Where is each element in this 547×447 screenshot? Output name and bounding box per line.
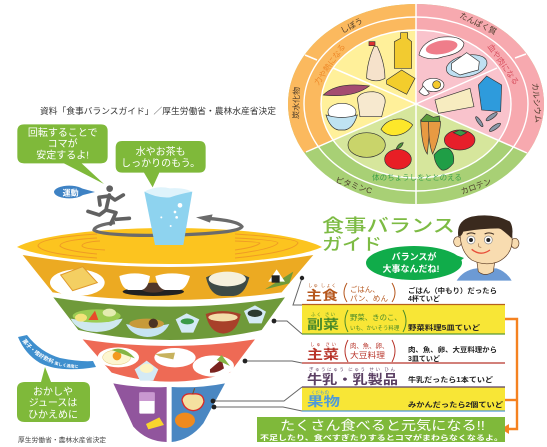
mouth [472, 249, 490, 253]
title: balance guide: 食事バランス [322, 216, 455, 236]
icon: glass of milk [139, 392, 155, 414]
tier: fruit [172, 383, 225, 442]
label: exercise [54, 186, 95, 198]
icon: apple slice [182, 388, 204, 411]
wheel labels: 炭水化物 [290, 87, 302, 119]
icon: tofu [452, 53, 479, 75]
inner plate colours [322, 30, 510, 178]
callout: limit snacks [17, 367, 90, 422]
icon: fried egg plate [98, 347, 139, 367]
icon: tofu plate [444, 51, 489, 81]
wheel food illustrations [323, 33, 502, 170]
row: fruit: くだもの [311, 390, 329, 396]
icon: cabbage [348, 133, 385, 157]
icon: orange [175, 413, 195, 428]
icon: cheese [435, 88, 474, 113]
icon: mayonnaise cap [369, 42, 375, 46]
row: staple foods: 4杯ていど [408, 294, 440, 303]
icon: sweet potato [323, 85, 369, 96]
callout: balance matters: 大事なんだね! [382, 263, 440, 274]
row: main dishes [307, 340, 497, 363]
row: staple foods: パン、めん [350, 294, 388, 303]
row: main dishes: 大豆料理 [350, 350, 385, 360]
wheel labels: ビタミンC [334, 176, 373, 196]
wheel labels: たんぱく質 [458, 10, 498, 37]
tier: main dishes [83, 339, 255, 382]
callout: drink water: 水やお茶も [136, 145, 186, 158]
banner: eat well [257, 417, 505, 442]
tier: staple foods [23, 255, 313, 300]
row: dairy: 牛乳だったら1本ていど [408, 375, 493, 384]
row: staple foods: 主食 [306, 288, 338, 303]
row: staple foods: ごはん（中もり）だったら [408, 286, 497, 295]
banner: eat well: たくさん食べると元気になる!! [280, 418, 485, 433]
wheel labels: しぼう [339, 16, 365, 35]
icon: milk carton [478, 76, 502, 112]
shirt [457, 268, 512, 281]
hair [458, 215, 513, 238]
ears [454, 237, 519, 248]
banner: eat well: 不足したり、食べすぎたりするとコマがまわらなくなるよ。 [260, 433, 503, 442]
icon: salad bowl [71, 309, 123, 332]
row: staple foods: しゅ しょく [308, 283, 336, 289]
food wheel [288, 4, 544, 204]
icon: fish plate [154, 348, 196, 367]
arrow: rotation [94, 214, 242, 235]
icon: tofu dish [135, 361, 158, 381]
callout: spin stabilises: 回転することで [28, 127, 97, 139]
glass of water [144, 187, 192, 245]
eyes [467, 236, 492, 244]
connector lines [211, 276, 304, 411]
callout: spin stabilises: コマが [48, 137, 78, 150]
icon: apple leaf [396, 143, 403, 149]
row: dairy [307, 366, 493, 387]
pupils [469, 238, 490, 242]
icon: cheese wedge [146, 417, 164, 429]
row: side dishes: 野菜、きのこ、 [350, 313, 402, 322]
icon: mayonnaise bottle [367, 47, 385, 81]
wheel spokes [305, 4, 527, 204]
icon: butter [387, 70, 415, 94]
wheel labels: 血や肉になる [486, 42, 521, 87]
wheel labels: カロテン [460, 177, 493, 196]
title: balance guide [322, 216, 455, 254]
tier: side dishes [53, 297, 285, 340]
callout: limit snacks: ひかえめに [28, 409, 78, 421]
ribbon: snacks and drinks [18, 335, 96, 370]
outer ring colours [288, 4, 544, 204]
callout: balance matters: バランスが [392, 251, 436, 262]
row: dairy: ぎゅうにゅう にゅう せい ひん [309, 366, 396, 373]
motion arrow around glass [17, 124, 242, 245]
callout: spin stabilises [17, 124, 108, 184]
icon: small vegetable dish [176, 313, 199, 333]
icon: miso soup [206, 311, 241, 334]
source line: 資料「食事バランスガイド」／厚生労働省・農林水産省決定 [40, 106, 277, 116]
row dividers [302, 304, 505, 411]
row: main dishes: 主菜 [307, 347, 339, 362]
icon: rice [328, 103, 356, 121]
icon: noodle bowl [206, 272, 249, 296]
icon: vegetable plate [126, 319, 169, 337]
wheel labels: 体のちょうしをととのえる [372, 172, 462, 182]
icon: apple [385, 149, 411, 169]
icon: tomato [444, 130, 475, 150]
icon: carrot two [429, 122, 441, 154]
icon: carrot tops [422, 114, 440, 122]
icon: eggshell [419, 86, 429, 95]
wheel labels [290, 10, 543, 196]
row: side dishes [307, 310, 480, 332]
row: side dishes: 野菜料理5皿ていど [408, 323, 480, 332]
ribbon: snacks and drinks: 菓子・嗜好飲料 楽しく適度に [22, 338, 78, 368]
row: staple foods [306, 283, 497, 303]
row: side dishes: 副菜 [307, 317, 339, 332]
label: exercise: 運動 [63, 187, 79, 197]
icon: tomato stem [453, 130, 467, 136]
callout: limit snacks: おかしや [33, 386, 73, 398]
icon: meat red part [425, 38, 459, 57]
icon: runner [88, 185, 129, 224]
callout: limit snacks: ジュースは [29, 397, 77, 409]
icon: lemon [381, 119, 413, 136]
icon: fish [475, 111, 502, 133]
wheel labels: 力や熱になる [312, 42, 347, 87]
icon: meat [419, 37, 464, 59]
icon: toast on plate [50, 267, 105, 296]
yellow row backgrounds [302, 305, 505, 411]
icon: green pepper [434, 148, 454, 170]
icon: two rice bowls [119, 273, 190, 296]
callout: balance matters [366, 246, 464, 280]
footer credit: 厚生労働省・農林水産省決定 [18, 435, 107, 444]
row: main dishes: 肉、魚、卵、大豆料理から [408, 345, 497, 354]
callout: drink water: しっかりのもう。 [121, 158, 200, 170]
row: fruit: 果物 [307, 394, 340, 409]
row: fruit: みかんだったら2個ていど [408, 400, 503, 409]
tier: dairy [113, 383, 167, 442]
title: balance guide: ガイド [322, 235, 382, 254]
row: side dishes: いも、かいそう料理 [350, 324, 400, 332]
icon: rice ball [265, 269, 293, 289]
row: staple foods: ごはん、 [350, 285, 380, 294]
icon: rice bowl [326, 115, 357, 130]
row: main dishes: 肉、魚、卵、 [350, 341, 388, 350]
row: dairy: 牛乳・乳製品 [307, 372, 398, 387]
arrow: orange bracket [501, 319, 517, 434]
callout: spin stabilises: 安定するよ! [36, 149, 89, 161]
tier: top disc [17, 228, 322, 264]
row: main dishes: 3皿ていど [408, 354, 440, 363]
eyebrows [467, 233, 494, 234]
face [460, 226, 512, 264]
row: fruit [307, 390, 503, 409]
spinning top [17, 228, 322, 442]
icon: meat plate [193, 355, 234, 377]
boy character [454, 215, 519, 281]
neck [477, 260, 495, 274]
icon: seaweed dish [244, 305, 266, 323]
row: main dishes: しゅ さい [310, 341, 336, 348]
callout: drink water [116, 141, 206, 187]
row: side dishes: ふく さい [311, 311, 336, 317]
icon: egg [423, 78, 444, 92]
icon: oil bottle [394, 33, 412, 68]
icon: egg yolk [433, 81, 441, 89]
icon: carrots [421, 120, 431, 154]
wheel labels: カルシウム [530, 82, 543, 123]
icon: bread [357, 92, 385, 117]
nose [478, 243, 481, 247]
